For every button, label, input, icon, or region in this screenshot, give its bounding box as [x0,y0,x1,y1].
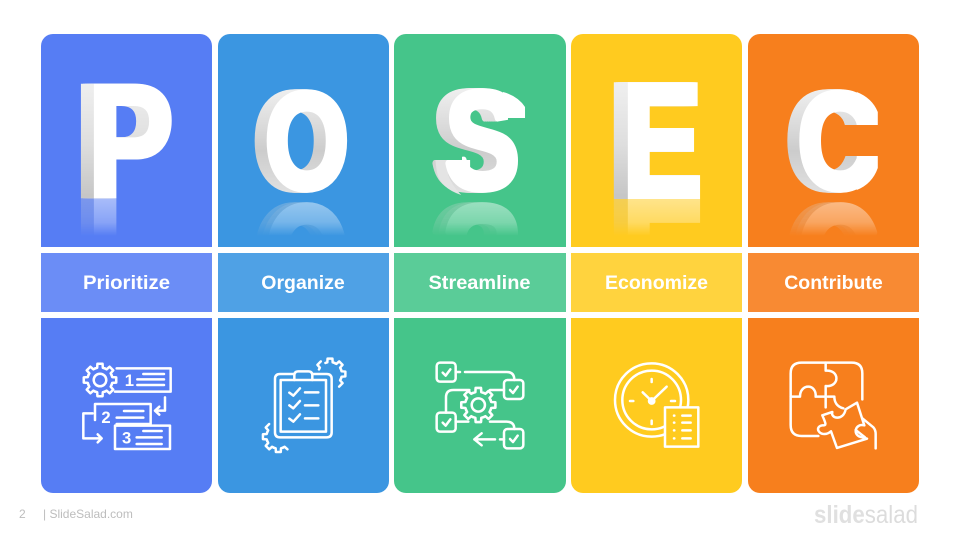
3D letter P: P [78,53,166,231]
3D letter S: S [432,63,507,218]
page number: 2 [19,507,26,521]
label: Streamline: Streamline [428,272,531,294]
icon: workflow with gear and checkboxes [437,363,523,448]
3D letter C [787,89,878,193]
3D letter E: E [616,51,697,231]
3D letter C: C [790,66,869,218]
3D letter C: C [796,66,875,218]
3D letter P: P [80,53,168,231]
3D letter P: P [87,53,174,231]
3D letter E: E [618,51,699,231]
reflection of S: S [438,177,513,332]
panel: Economize column [571,34,742,493]
3D letter O: O [265,66,349,218]
3D letter P: P [86,53,173,231]
letter card [394,34,566,247]
3D letter O: O [263,66,347,218]
letter card [218,34,389,247]
panel: Organize column [218,34,389,493]
3D letter O: O [253,66,337,218]
icon: puzzle pieces and hand [791,363,876,448]
reflection of O: O [253,177,337,329]
3D letter P: P [82,53,169,231]
3D letter S: S [443,63,517,218]
label band [394,253,566,312]
3D letter S: S [441,63,515,218]
panel: Contribute column [748,34,919,493]
reflection of C [790,202,877,234]
logo: slidesalad: slidesalad [814,501,918,529]
reflection of S: S [445,177,520,332]
reflection of E: E [608,167,689,347]
3D letter O: O [261,66,345,218]
icon: clock with document [615,363,698,447]
3D letter C: C [798,66,877,218]
footer: SlideSalad.com: | SlideSalad.com [43,507,133,521]
3D letter P: P [74,53,161,231]
3D letter S [432,88,526,195]
reflection of C: C [792,177,871,329]
3D letter S: S [445,63,520,218]
3D letter S: S [438,63,513,218]
reflection of O [258,202,344,234]
3D letter E: E [608,51,689,231]
reflection of C: C [786,177,865,329]
reflection of E: E [622,167,703,347]
label: Contribute: Contribute [784,272,883,294]
letter card [748,34,919,247]
3D letter E: E [610,51,691,231]
icon card [748,318,919,493]
icon: numbered priority list with gear [83,364,171,449]
3D letter S: S [434,63,509,218]
icon card [394,318,566,493]
icon: numbered priority list with gear: 1 [125,371,134,390]
icon card [41,318,212,493]
3D letter E: E [612,51,693,231]
label: Organize: Organize [261,272,345,294]
3D letter C: C [786,66,865,218]
icon: numbered priority list with gear: 3 [122,428,131,447]
3D letter C: C [788,66,867,218]
label: Economize: Economize [605,272,708,294]
3D letter S: S [436,63,511,218]
3D letter P: P [84,53,171,231]
icon card [571,318,742,493]
label band [571,253,742,312]
letter card [41,34,212,247]
icon: numbered priority list with gear: 2 [101,408,111,427]
letter card [571,34,742,247]
label band [41,253,212,312]
3D letter E: E [622,51,703,231]
3D letter E: E [614,51,695,231]
reflection of C: C [798,177,877,329]
reflection of S [432,202,518,234]
label band [218,253,389,312]
3D letter O: O [259,66,343,218]
3D letter C: C [794,66,873,218]
panel: Streamline column [394,34,566,493]
label: Prioritize: Prioritize [83,272,170,294]
3D letter O: O [255,66,339,218]
reflection of P: P [74,165,161,343]
icon: clipboard checklist with gears [263,359,345,452]
3D letter O: O [257,66,341,218]
reflection of O: O [265,177,349,329]
3D letter C: C [792,66,871,218]
reflection of S: S [432,177,507,332]
3D letter E: E [620,51,701,231]
3D letter P: P [76,53,164,231]
icon card [218,318,389,493]
reflection of P: P [87,165,174,343]
reflection of P [81,198,116,234]
reflection of O: O [259,177,343,329]
reflection of E [614,199,700,234]
panel: Prioritize column [41,34,212,493]
label band [748,253,919,312]
